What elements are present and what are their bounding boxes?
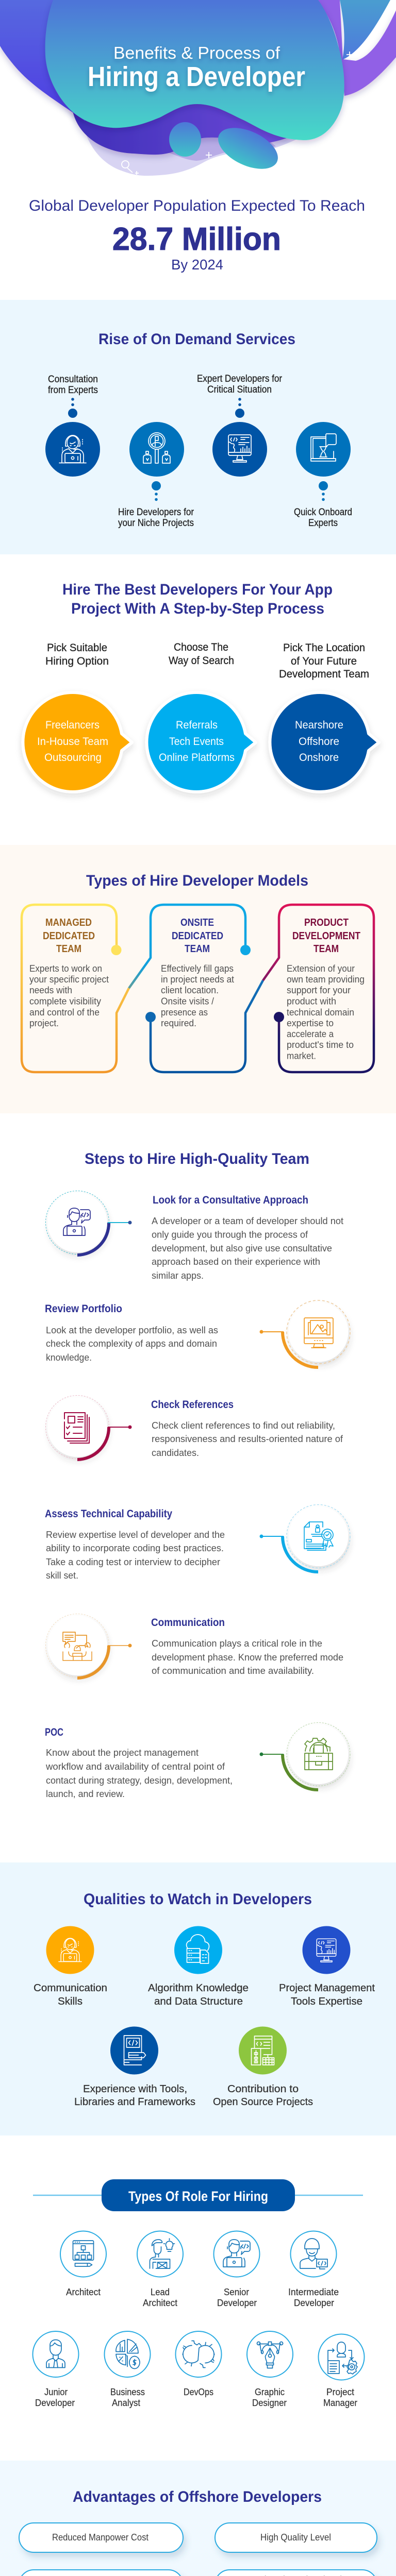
card: managed dedicated team: TEAM: [56, 943, 81, 955]
statistic block: [29, 197, 365, 273]
role: lead architect: Architect: [143, 2298, 177, 2308]
role: senior developer: [217, 2240, 257, 2308]
quality: experience with tools: Libraries and Frameworks: [74, 2096, 195, 2108]
card: managed dedicated team: [29, 917, 109, 1028]
quality: project management tools expertise: Project Management: [279, 1982, 375, 1994]
card: product development team: product with: [287, 996, 336, 1007]
statistic block: 28.7 Million: [112, 222, 281, 257]
role: junior developer: [35, 2340, 75, 2408]
card: managed dedicated team: MANAGED: [45, 917, 92, 928]
hero: small oval: [169, 122, 201, 157]
role: architect: [66, 2241, 101, 2297]
step: pick suitable hiring option: Outsourcing: [44, 752, 102, 764]
panel: types of role for hiring: [33, 2179, 364, 2408]
card: onsite dedicated team: DEDICATED: [172, 930, 223, 942]
role: graphic designer: Designer: [252, 2398, 287, 2408]
heading: Hire The Best Developers For Your App: [62, 581, 333, 598]
step: choose the way of search: Tech Events: [169, 736, 224, 748]
panel: advantages of offshore developers: [0, 2461, 396, 2576]
card: onsite dedicated team: Onsite visits /: [161, 996, 214, 1007]
pill: reduced manpower cost: Reduced Manpower Cost: [52, 2532, 148, 2543]
step: pick the location of your team: Development Team: [279, 668, 369, 680]
item: consultation from experts: from Experts: [48, 385, 98, 396]
step 1: consultative approach: Look for a Consultative Approach: [153, 1194, 308, 1206]
quality: project management tools expertise: Tools Expertise: [291, 1996, 362, 2007]
step: pick suitable hiring option: [23, 642, 132, 792]
card: product development team: market.: [287, 1051, 316, 1061]
step: choose the way of search: Way of Search: [169, 655, 234, 667]
card: managed dedicated team: and control of the: [29, 1007, 100, 1018]
quality: communication skills: Skills: [58, 1996, 82, 2007]
card: product development team: own team providing: [287, 974, 365, 985]
quality: contribution to open source: [213, 2027, 313, 2108]
step 6: poc: contact during strategy, design, development,: [46, 1775, 233, 1786]
role: lead architect: Lead: [151, 2287, 170, 2297]
card outlines: [22, 905, 374, 1072]
hero: lavender blob: [82, 124, 302, 176]
step 6: poc: Know about the project management: [46, 1748, 199, 1758]
step: pick suitable hiring option: Hiring Option: [45, 655, 109, 667]
step 6: poc: POC: [45, 1726, 63, 1738]
role: business analyst: Business: [110, 2387, 145, 2397]
card: managed dedicated team: needs with: [29, 985, 72, 995]
card: product development team: technical domain: [287, 1007, 354, 1018]
step: pick suitable hiring option: Pick Suitable: [47, 642, 107, 654]
hero: left blue blob: [0, 0, 85, 121]
step: pick the location of your team: [270, 642, 379, 792]
step 5: communication: development phase. Know the preferred mode: [152, 1652, 343, 1663]
step 5: communication: of communication and time availability.: [152, 1666, 314, 1676]
card: managed dedicated team: project.: [29, 1018, 59, 1028]
role: project manager: [323, 2342, 357, 2408]
card: onsite dedicated team: required.: [161, 1018, 196, 1028]
quality: contribution to open source: Open Source Projects: [213, 2096, 313, 2108]
step 3: check references: candidates.: [152, 1448, 199, 1458]
quality: experience with tools: [74, 2027, 195, 2108]
card: product development team: Extension of your: [287, 963, 355, 974]
role circles: [33, 2231, 364, 2380]
role: project manager: Manager: [323, 2398, 357, 2408]
step 4: assess technical capability: ability to incorporate coding best practices.: [46, 1543, 224, 1553]
heading pill: Types Of Role For Hiring: [128, 2189, 268, 2204]
step 1: consultative approach: A developer or a team of developer should not: [152, 1216, 343, 1226]
step 3: check references: [45, 1395, 343, 1460]
step 1: consultative approach: approach based on their experience with: [152, 1257, 320, 1267]
step: pick the location of your team: Onshore: [299, 752, 339, 764]
item: expert developers for critical situation: Critical Situation: [207, 384, 272, 395]
hero: sparkle marks: [122, 52, 353, 175]
statistic block: By 2024: [171, 257, 223, 273]
card: onsite dedicated team: in project needs at: [161, 974, 234, 985]
step 1: consultative approach: only guide you through the process of: [152, 1229, 308, 1240]
card: managed dedicated team: Experts to work on: [29, 963, 102, 974]
step 6: poc: workflow and availability of central point of: [45, 1761, 225, 1772]
role: intermediate developer: Intermediate: [288, 2287, 339, 2297]
role: senior developer: Developer: [217, 2298, 257, 2308]
hero title: Hiring a Developer: [88, 61, 305, 92]
role: senior developer: Senior: [224, 2287, 249, 2297]
quality: algorithm knowledge and data structure: and Data Structure: [154, 1996, 243, 2007]
step: choose the way of search: Referrals: [176, 719, 218, 731]
step: pick the location of your team: Nearshore: [295, 719, 343, 731]
step 2: review portfolio: Look at the developer portfolio, as well as: [46, 1325, 218, 1335]
hero section: [0, 0, 396, 177]
card connectors dots: [111, 945, 284, 1022]
step 3: check references: responsiveness and results-oriented nature of: [152, 1434, 343, 1444]
role: devops: [183, 2341, 214, 2397]
panel: hire the best developers: [23, 581, 379, 792]
role: lead architect: [143, 2239, 177, 2308]
quality: algorithm knowledge and data structure: Algorithm Knowledge: [148, 1982, 249, 1994]
card: product development team: TEAM: [314, 943, 339, 955]
quality: project management tools expertise: [279, 1926, 375, 2007]
item: quick onboard experts: [294, 422, 352, 529]
step 1: consultative approach: [45, 1191, 343, 1281]
role: intermediate developer: Developer: [294, 2298, 334, 2308]
pill: superior it skill sets: [19, 2570, 183, 2576]
role: graphic designer: Graphic: [255, 2387, 285, 2397]
role: business analyst: [110, 2339, 145, 2408]
quality: communication skills: Communication: [34, 1982, 107, 1994]
panel: types of hire developer models: [0, 845, 396, 1113]
hero title: [88, 43, 305, 92]
step 2: review portfolio: [45, 1300, 350, 1367]
card: product development team: DEVELOPMENT: [292, 930, 360, 942]
card: managed dedicated team: complete visibility: [29, 996, 101, 1007]
role: graphic designer: [252, 2342, 287, 2408]
role: business analyst: Analyst: [112, 2398, 140, 2408]
hero: right blue blob: [340, 0, 390, 60]
pill: high quality level: [215, 2523, 377, 2552]
hero: lilac blob: [168, 138, 276, 161]
card: product development team: [287, 917, 365, 1061]
step: pick the location of your team: Pick The Location: [283, 642, 365, 654]
quality: communication skills: [34, 1926, 107, 2007]
pill: reduced overhead: [215, 2570, 377, 2576]
card: product development team: PRODUCT: [304, 917, 349, 928]
panel: rise of on demand services: [0, 300, 396, 554]
step 4: assess technical capability: skill set.: [46, 1570, 78, 1581]
heading: Project With A Step-by-Step Process: [71, 600, 324, 617]
step 2: review portfolio: check the complexity of apps and domain: [46, 1338, 217, 1349]
quality: contribution to open source: Contribution to: [227, 2083, 299, 2095]
role: project manager: Project: [326, 2387, 354, 2397]
step 5: communication: [45, 1614, 343, 1678]
card: managed dedicated team: DEDICATED: [43, 930, 95, 942]
item: consultation from experts: [45, 374, 100, 477]
panel: qualities to watch in developers: [0, 1862, 396, 2136]
step 2: review portfolio: Review Portfolio: [45, 1303, 122, 1315]
card: product development team: product's time to: [287, 1040, 354, 1050]
card: product development team: expertise to: [287, 1018, 334, 1028]
step 5: communication: Communication: [151, 1617, 225, 1629]
step 5: communication: Communication plays a critical role in the: [152, 1638, 322, 1649]
card: onsite dedicated team: presence as: [161, 1007, 208, 1018]
role: architect: Architect: [66, 2287, 101, 2297]
step 6: poc: [45, 1723, 350, 1799]
item: expert developers for critical situation: Expert Developers for: [197, 374, 283, 384]
step: pick suitable hiring option: In-House Team: [37, 736, 108, 748]
heading: Qualities to Watch in Developers: [84, 1891, 312, 1908]
heading: [62, 581, 333, 617]
heading: Types of Hire Developer Models: [86, 872, 308, 889]
item: quick onboard experts: Experts: [308, 518, 338, 529]
step 4: assess technical capability: [45, 1504, 350, 1581]
item: consultation from experts: Consultation: [48, 374, 98, 385]
step 2: review portfolio: knowledge.: [46, 1352, 92, 1363]
step 4: assess technical capability: Assess Technical Capability: [45, 1508, 172, 1520]
panel: steps to hire high-quality team: [45, 1150, 350, 1799]
card: managed dedicated team: your specific project: [29, 974, 109, 985]
card: onsite dedicated team: Effectively fill gaps: [161, 963, 234, 974]
hero title: Benefits & Process of: [113, 43, 280, 62]
quality: algorithm knowledge and data structure: [148, 1926, 249, 2007]
hero: main teal blob: [45, 0, 344, 140]
item: hire developers for niche projects: your Niche Projects: [118, 518, 194, 529]
quality: experience with tools: Experience with Tools,: [83, 2083, 187, 2095]
step 1: consultative approach: development, but also give use consultative: [152, 1243, 332, 1253]
step: choose the way of search: Online Platforms: [159, 752, 235, 764]
card: product development team: support for your: [287, 985, 351, 995]
card: product development team: accelerate a: [287, 1029, 334, 1039]
pill: high quality level: High Quality Level: [260, 2532, 331, 2543]
role: junior developer: Developer: [35, 2398, 75, 2408]
card: onsite dedicated team: ONSITE: [180, 917, 214, 928]
heading: Advantages of Offshore Developers: [73, 2488, 322, 2505]
heading: Steps to Hire High-Quality Team: [85, 1150, 309, 1167]
item: quick onboard experts: Quick Onboard: [294, 507, 352, 518]
statistic block: Global Developer Population Expected To Reach: [29, 197, 365, 214]
step 3: check references: Check References: [151, 1399, 234, 1411]
step: pick the location of your team: Offshore: [299, 736, 339, 748]
hero: tilted oval: [212, 120, 284, 177]
heading pill: [102, 2179, 295, 2211]
item: hire developers for niche projects: Hire Developers for: [118, 507, 194, 518]
card: onsite dedicated team: client location.: [161, 985, 219, 995]
item: hire developers for niche projects: [118, 422, 194, 529]
step: pick the location of your team: of Your Future: [291, 655, 357, 667]
heading: Rise of On Demand Services: [98, 331, 295, 348]
hero: right purple blob: [317, 0, 396, 96]
step 1: consultative approach: similar apps.: [152, 1270, 204, 1281]
role: devops: DevOps: [184, 2387, 213, 2397]
step: choose the way of search: Choose The: [174, 641, 228, 653]
step 6: poc: launch, and review.: [46, 1789, 125, 1799]
step 3: check references: Check client references to find out reliability,: [152, 1420, 335, 1431]
role: intermediate developer: [288, 2239, 339, 2308]
role: junior developer: Junior: [44, 2387, 68, 2397]
step 4: assess technical capability: Take a coding test or interview to decipher: [46, 1557, 220, 1567]
card: onsite dedicated team: TEAM: [185, 943, 210, 955]
card: onsite dedicated team: [161, 917, 234, 1028]
pill: reduced manpower cost: [19, 2523, 183, 2552]
step 4: assess technical capability: Review expertise level of developer and the: [46, 1530, 225, 1540]
step: pick suitable hiring option: Freelancers: [45, 719, 100, 731]
item: expert developers for critical situation: [197, 374, 283, 477]
hero: dark purple blob: [72, 93, 290, 155]
step: choose the way of search: [146, 641, 256, 792]
